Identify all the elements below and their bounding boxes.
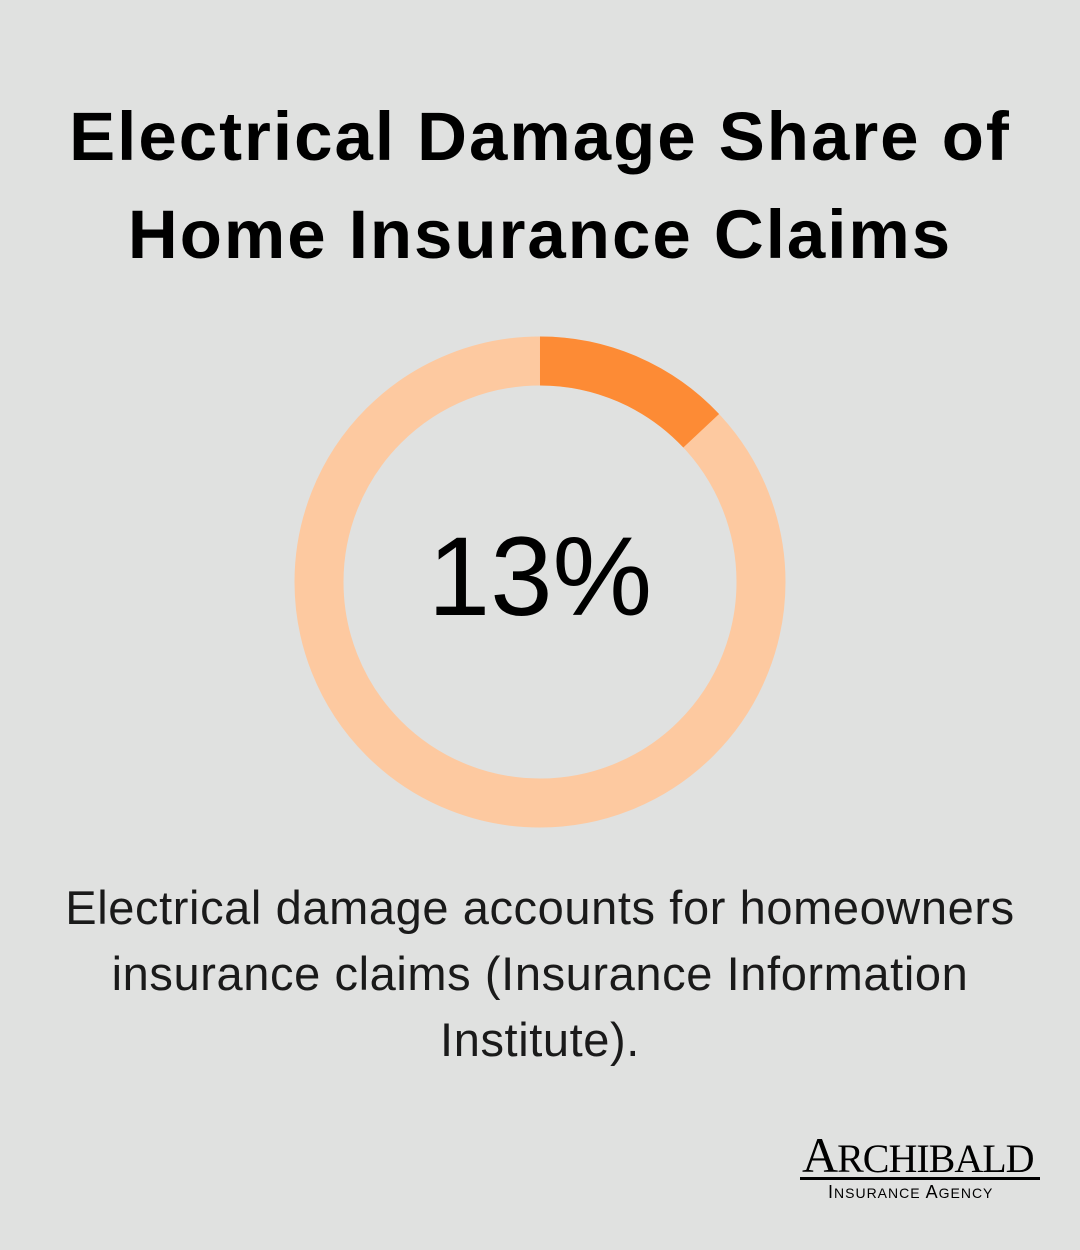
title: Electrical Damage Share of (69, 98, 1011, 175)
title: Home Insurance Claims (128, 196, 952, 273)
logo: ARCHIBALD (802, 1127, 1034, 1183)
highlighted segment 13% (540, 361, 701, 431)
big value: 13% (428, 514, 652, 639)
title (69, 98, 1011, 273)
description text: Electrical damage accounts for homeowners insurance claims (Insurance Information Institute). (65, 881, 1015, 1066)
logo: INSURANCE AGENCY (828, 1182, 993, 1202)
